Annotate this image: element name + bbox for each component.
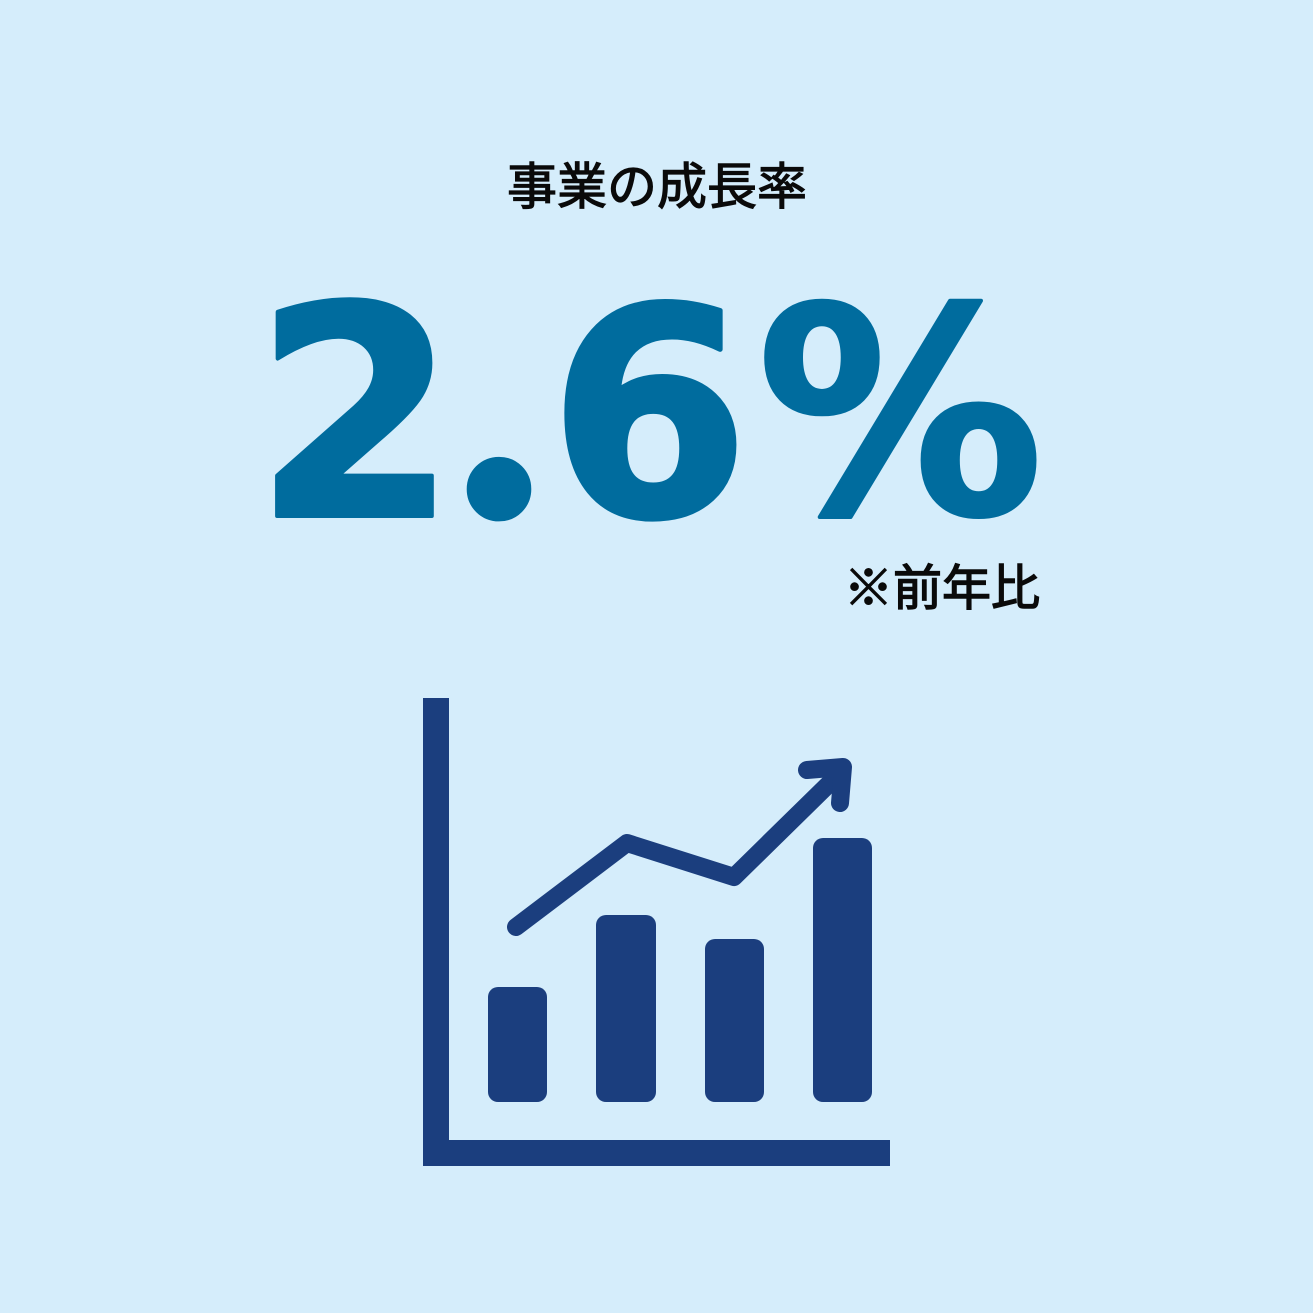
big number: 2.6%: 2 — [254, 245, 457, 585]
big number: 2.6%: 6 — [549, 248, 749, 583]
chart axes — [423, 698, 890, 1166]
big number: 2.6%: % — [757, 249, 1044, 581]
icon: growth chart — [423, 698, 890, 1166]
trend arrow — [516, 767, 843, 927]
big number: 2.6% — [254, 233, 1044, 585]
big number: 2.6%: . — [460, 233, 538, 578]
title: 事業の成長率 — [507, 159, 807, 215]
note: year over year: ※前年比 — [844, 562, 1040, 616]
bars — [488, 838, 872, 1102]
